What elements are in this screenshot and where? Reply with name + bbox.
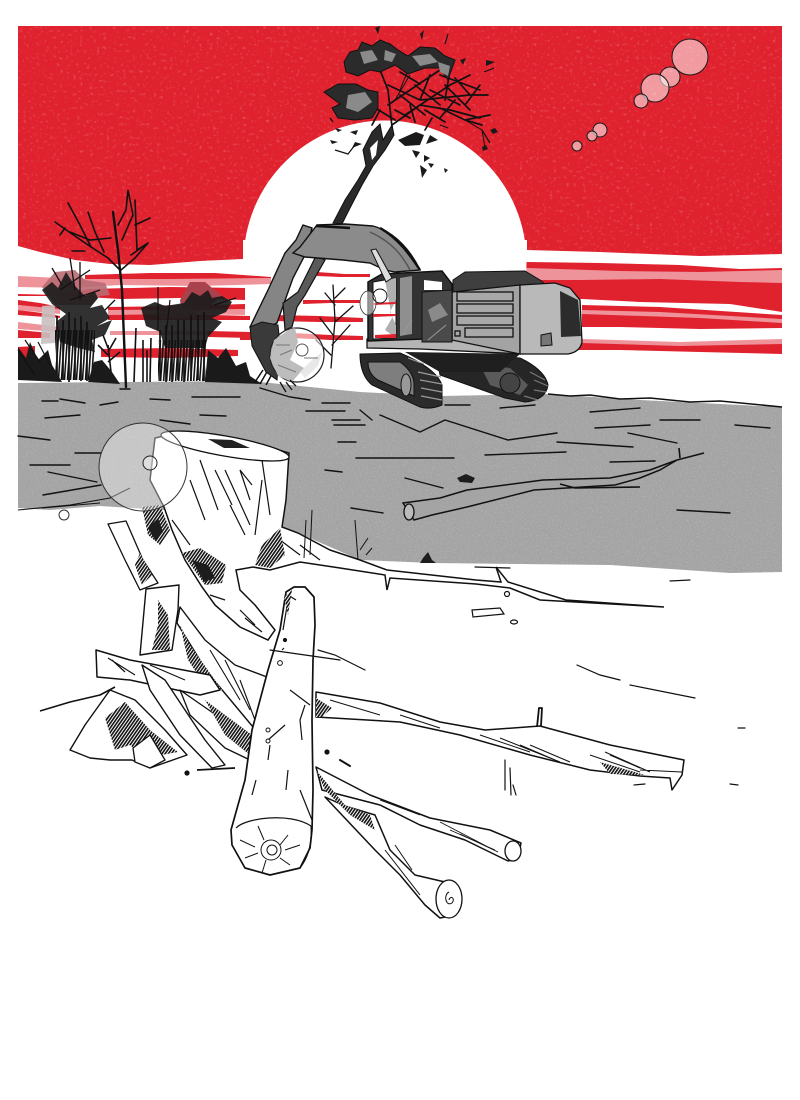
sun (245, 120, 526, 284)
left trees: canopy ink (42, 272, 112, 352)
excavator: engine top (453, 271, 550, 296)
log: large diagonal (177, 607, 267, 740)
thin trunks and sapling (98, 328, 151, 382)
branch: fallen log on grey ground (403, 448, 704, 520)
stump: large tree stump (18, 425, 664, 640)
sapling: beside bucket (316, 285, 353, 368)
tree: top leaf clumps (344, 40, 455, 80)
excavator: undercarriage shadow (405, 352, 520, 372)
right trees: canopy tint (180, 282, 222, 312)
stump: grass (304, 510, 372, 560)
excavator: rear track (436, 353, 548, 402)
tree: leaf highlights (360, 50, 450, 76)
shrubs: near bucket (205, 348, 262, 384)
debris: scattered marks on white ground (185, 567, 745, 795)
excavator (250, 224, 582, 408)
tree: left leaf clump (324, 84, 378, 120)
excavator: cab (360, 271, 452, 342)
ground: horizon line (548, 394, 782, 407)
tree: branch lattice (362, 70, 490, 130)
rocks (70, 690, 187, 768)
bubbles: top right (572, 39, 708, 151)
sky: left red and pink bands (18, 287, 251, 360)
log: curled end branch (325, 797, 460, 918)
tree: uprooted tree held by excavator (324, 26, 498, 224)
left trees: shrubs (18, 342, 62, 382)
log: crossing pieces (142, 665, 225, 768)
stump: body (150, 432, 664, 640)
ground: grey cleared land (18, 380, 782, 575)
logs: pile of cut timber (40, 521, 684, 918)
ground: cracks (18, 388, 770, 513)
tree: trunk (333, 124, 394, 224)
excavator: arm (250, 225, 325, 330)
excavator: base deck (367, 336, 523, 354)
log: main foreground log (231, 587, 315, 875)
sky texture (18, 26, 782, 266)
sky: upper red field (18, 26, 782, 265)
excavator: front track (360, 353, 442, 408)
tree cluster: left group (18, 258, 272, 385)
right trees: canopy ink (141, 290, 232, 348)
sky: right red and pink bands (420, 262, 782, 354)
stump lens and small circles (59, 423, 187, 520)
log: horizontal short (96, 650, 220, 695)
illustration: felled forest with excavator under a white sun (17, 26, 782, 919)
left trees: trunks (57, 312, 87, 382)
excavator: bucket (250, 322, 280, 380)
right trees: trunks (160, 312, 204, 382)
sky: bands crossing the sun (18, 272, 370, 340)
excavator: counterweight panel (452, 283, 582, 354)
tree: right foliage dots (330, 26, 498, 178)
log: lower branch (316, 767, 521, 861)
left trees: canopy tint (42, 270, 110, 305)
bare tree: left sapling (55, 190, 150, 387)
log: short upright logs (108, 521, 158, 590)
panel: red sky with white bands (18, 26, 782, 358)
stump: bark lines (172, 460, 320, 632)
log: long right trunk (316, 692, 684, 790)
lens: over bucket (270, 328, 324, 382)
log: thin branch left (40, 687, 115, 711)
stump: hatched shadows (182, 548, 226, 585)
excavator: vents (455, 292, 513, 337)
excavator: boom (293, 224, 420, 272)
stump: left ground edge root (18, 488, 130, 510)
